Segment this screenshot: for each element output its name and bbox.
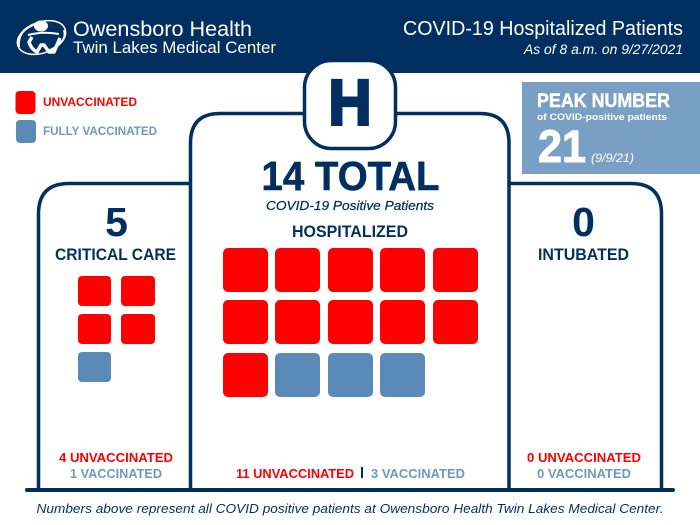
- panel: hospitalized: [190, 114, 509, 490]
- logo wordmark: Owensboro Health: [73, 18, 252, 41]
- baseline: [25, 488, 675, 492]
- panel: intubated: 0 VACCINATED: [537, 466, 631, 481]
- panel: intubated: 0: [572, 199, 595, 245]
- panel: critical care: 4 UNVACCINATED: [59, 450, 173, 465]
- title: COVID-19 Hospitalized Patients: [403, 18, 683, 40]
- panel: intubated: 0 UNVACCINATED: [527, 450, 641, 465]
- panel: hospitalized: HOSPITALIZED: [292, 222, 408, 241]
- title: As of 8 a.m. on 9/27/2021: [523, 41, 683, 57]
- logo wordmark: [73, 18, 277, 57]
- panel: hospitalized: 11 UNVACCINATED: [236, 466, 354, 481]
- panel: hospitalized: 3 VACCINATED: [371, 466, 465, 481]
- panel: peak number: [522, 82, 700, 174]
- footnote: Numbers above represent all COVID positive patients at Owensboro Health Twin Lakes Medical Center.: [36, 501, 664, 516]
- legend: [16, 91, 157, 143]
- logo wordmark: Twin Lakes Medical Center: [73, 39, 277, 57]
- panel: critical care: 1 VACCINATED: [70, 466, 162, 481]
- panel: peak number: PEAK NUMBER: [537, 91, 670, 112]
- panel: intubated: [509, 184, 662, 490]
- icon: hospital logo: [13, 14, 70, 61]
- icon: hospital H badge: [304, 60, 396, 148]
- panel: critical care: CRITICAL CARE: [55, 245, 176, 264]
- panel: critical care: [38, 184, 191, 490]
- panel: critical care: 5: [105, 199, 128, 245]
- title: [403, 18, 683, 57]
- panel: peak number: of COVID-positive patients: [537, 112, 667, 123]
- panel: hospitalized: 14 TOTAL: [262, 153, 440, 199]
- panel: peak number: 21: [538, 121, 586, 172]
- legend: FULLY VACCINATED: [43, 124, 157, 138]
- panel: intubated: INTUBATED: [538, 245, 629, 264]
- header band: [0, 0, 700, 73]
- panel: peak number: (9/9/21): [591, 153, 634, 165]
- icon: hospital H badge: H: [328, 66, 372, 138]
- legend: UNVACCINATED: [43, 95, 137, 109]
- panel: hospitalized: COVID-19 Positive Patients: [266, 198, 435, 213]
